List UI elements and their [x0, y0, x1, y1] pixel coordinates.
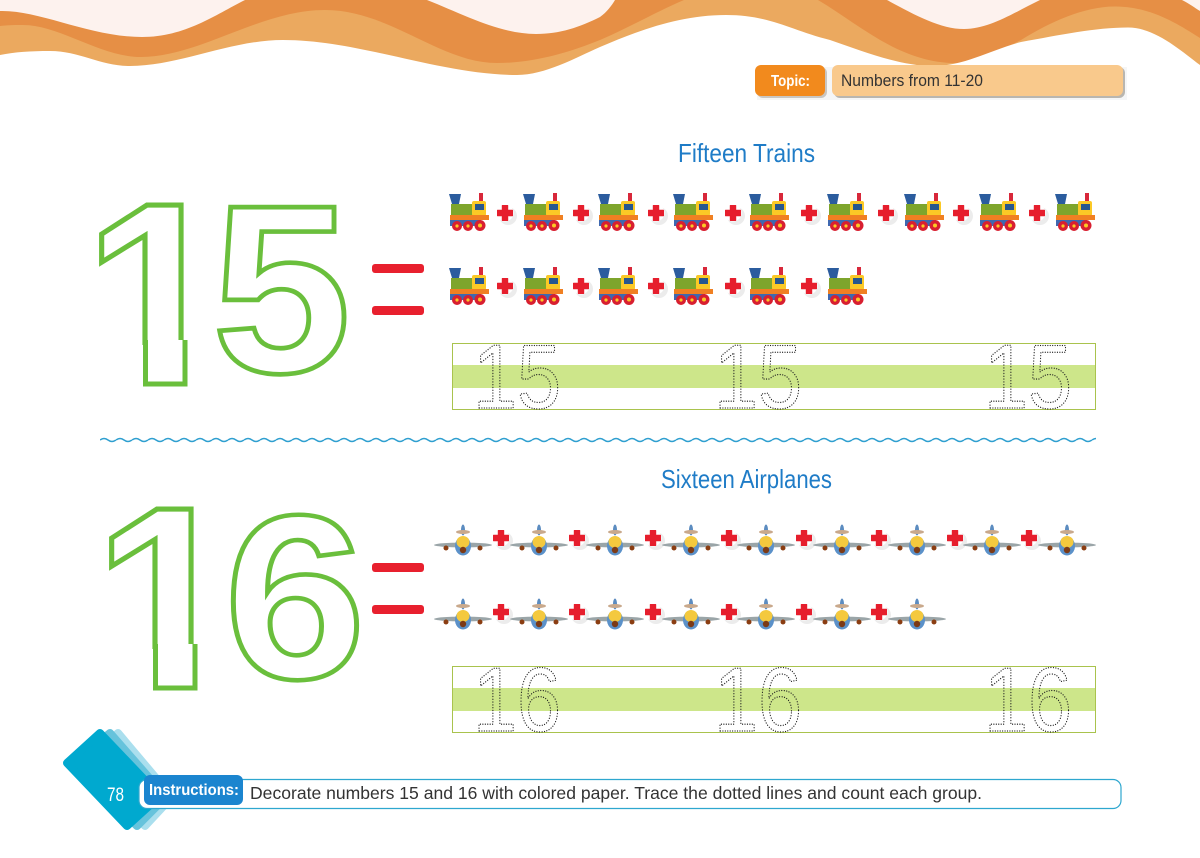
big number 15 — [84, 149, 351, 440]
instructions label — [144, 775, 243, 805]
decorative wave header — [0, 0, 1200, 90]
tracing box 15: 15 — [473, 327, 561, 428]
page number tab — [67, 733, 172, 826]
airplane row 1 — [434, 524, 1096, 556]
topic bar — [755, 65, 1127, 100]
train row 1 — [449, 193, 1095, 231]
instruction bar — [139, 775, 1121, 808]
heading: fifteen trains: Fifteen Trains — [678, 138, 815, 168]
heading: sixteen airplanes: Sixteen Airplanes — [661, 464, 832, 494]
tracing box 16: 16 — [984, 650, 1072, 751]
tracing box 15: 15 — [984, 327, 1072, 428]
page number tab: 78 — [107, 785, 124, 806]
airplane row 2 — [434, 598, 946, 630]
equals sign 16 — [372, 563, 424, 614]
big number 16: 1 — [94, 453, 240, 744]
big number 15: 1 — [84, 149, 230, 440]
instructions label: Instructions: — [149, 782, 239, 799]
big number 16: 6 — [224, 467, 366, 728]
tracing box 15 — [452, 327, 1096, 428]
equals sign 15 — [372, 264, 424, 315]
instruction text: Decorate numbers 15 and 16 with colored paper. Trace the dotted lines and count each group. — [250, 783, 982, 803]
wavy divider — [100, 436, 1096, 444]
train row 2 — [449, 267, 867, 305]
topic label: Topic: — [771, 73, 810, 90]
tracing box 16: 16 — [473, 650, 561, 751]
big number 15: 5 — [212, 155, 351, 423]
tracing box 16 — [452, 650, 1096, 751]
tracing box 15: 15 — [714, 327, 802, 428]
big number 16 — [94, 453, 366, 744]
tracing box 16: 16 — [714, 650, 802, 751]
topic value — [832, 65, 1125, 98]
topic label — [755, 65, 827, 98]
topic value: Numbers from 11-20 — [841, 71, 983, 90]
